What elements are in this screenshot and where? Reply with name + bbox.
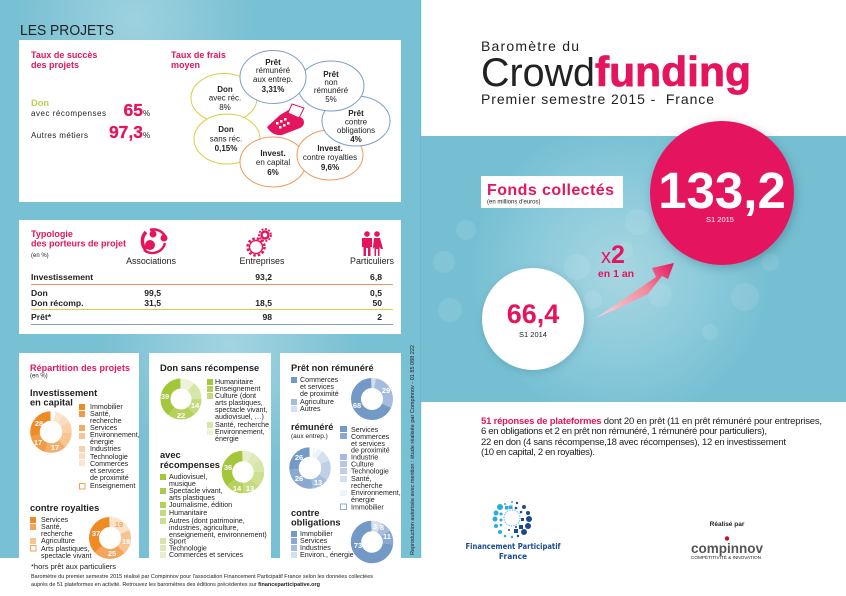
bubble: invest en capital: [240, 137, 306, 187]
column labels: [126, 256, 395, 266]
icon: payment terminal: [267, 104, 304, 135]
heading: les projets: LES PROJETS: [20, 22, 114, 39]
donut: contre obligations: 11: [383, 532, 391, 541]
donut: contre royalties: 19: [122, 537, 130, 546]
bubble: invest en capital: en capital: [256, 158, 290, 167]
row: investissement: 6,8: [370, 272, 382, 282]
heading: avec recompenses: avec: [160, 450, 181, 460]
heading: typologie: Typologie: [31, 229, 73, 239]
legend: contre royalties: Santé,: [41, 523, 62, 531]
legend: pret non remunere: Agriculture: [300, 398, 334, 406]
row: investissement: Investissement: [31, 272, 93, 282]
stat: autres metiers: Autres métiers: [31, 131, 88, 140]
heading: avec recompenses: récompenses: [160, 460, 220, 470]
legend: investissement en capital: [79, 403, 140, 490]
legend: don sans recompense: Santé, recherche: [215, 421, 269, 429]
donut: don sans recompense: 14: [191, 401, 200, 410]
legend: remunere: et services: [351, 440, 385, 448]
circle: 66,4 S1 2014: 66,4: [507, 299, 559, 329]
legend: investissement en capital: Technologie: [90, 453, 128, 461]
heading: pret non remunere: Prêt non rémunéré: [291, 363, 374, 373]
legend: don sans recompense: [207, 378, 269, 443]
multiplier: x2 en 1 an: [598, 241, 634, 280]
legend: investissement en capital: Immobilier: [90, 403, 123, 411]
arrow: growth: [596, 263, 674, 318]
column labels: Entreprises: [240, 256, 285, 266]
bubble: invest en capital: 6%: [267, 168, 279, 177]
legend: pret non remunere: et services: [300, 383, 334, 391]
title block: funding: [595, 48, 751, 95]
bubble: pret contre obligations: Prêt: [348, 109, 364, 118]
stat: don avec recompenses: avec récompenses: [31, 109, 106, 118]
row: don recomp: [31, 298, 382, 308]
legend: contre royalties: Services: [41, 516, 69, 524]
row: don recomp: Don récomp.: [31, 298, 84, 308]
donut: investissement en capital: 28: [35, 419, 43, 428]
legend: remunere: recherche: [351, 482, 383, 490]
column labels: Associations: [126, 256, 176, 266]
bubble: pret non remunere: Prêt: [323, 70, 339, 79]
legend: remunere: Technologie: [351, 468, 389, 476]
heading: remunere: rémunéré: [291, 422, 333, 432]
row: pret: 2: [377, 312, 382, 322]
bubble: invest contre royalties: contre royalties: [303, 153, 357, 162]
row: don: Don: [31, 288, 48, 298]
thin teal divider: [420, 0, 421, 558]
donut: investissement en capital: 17: [34, 438, 42, 447]
subheading: aux entrep: (aux entrep.): [291, 433, 328, 440]
heading: contre obligations: contre: [291, 508, 319, 518]
donut: contre obligations: 3: [373, 522, 377, 531]
panel: don: [149, 353, 271, 559]
donut: avec recompenses: 36: [224, 463, 232, 472]
panel: repartition investissement: [19, 353, 140, 560]
title block: Premier semestre 2015 - France: [481, 91, 714, 107]
donut: contre obligations: [354, 522, 391, 558]
bubble: pret contre obligations: obligations: [337, 126, 375, 135]
legend: avec recompenses: Spectacle vivant,: [169, 487, 223, 495]
heading: taux de succes: Taux de succès: [31, 50, 97, 60]
title block: Baromètre du: [481, 38, 579, 54]
legend: pret non remunere: Commerces: [300, 376, 339, 384]
heading: investissement en capital: Investissement: [30, 388, 97, 398]
footnote: *hors prêt aux particuliers: [31, 562, 116, 571]
bubble: invest en capital: Invest.: [260, 149, 286, 158]
legend: contre obligations: Industries: [300, 544, 331, 552]
donut: investissement en capital: 17: [51, 443, 59, 452]
legend: remunere: Commerces: [351, 433, 390, 441]
legend: don sans recompense: Humanitaire: [215, 378, 253, 386]
legend: remunere: Services: [351, 426, 379, 434]
heading: contre obligations: obligations: [291, 518, 341, 528]
legend: contre royalties: recherche: [41, 530, 73, 538]
bubble: pret remunere: rémunéré: [256, 66, 291, 75]
legend: remunere: de proximité: [351, 446, 390, 454]
donut: contre obligations: 73: [354, 541, 362, 550]
heading: typologie: des porteurs de projet: [31, 238, 126, 248]
donut: contre royalties: [92, 520, 130, 558]
source note: Baromètre du premier semestre 2015 réalisé par Compinnov pour l'association Financement Participatif France selon les données collectées: [31, 574, 373, 580]
donut: contre royalties: 37: [92, 529, 100, 538]
text: plateformes: 6 en obligations et 2 en prêt non rémunéré, 1 rémunéré pour particuliers),: [481, 426, 767, 437]
circle: 133,2 S1 2015: S1 2015: [706, 215, 734, 224]
legend: avec recompenses: arts plastiques: [169, 494, 215, 502]
legend: avec recompenses: Autres (dont patrimoine,: [169, 517, 245, 525]
legend: investissement en capital: de proximité: [90, 474, 129, 482]
stat: don avec recompenses: [31, 98, 150, 120]
bubble: don avec rec: [191, 74, 257, 122]
bubble: don sans rec: 0,15%: [215, 144, 237, 153]
label: fonds collectes: (en millions d'euros): [487, 200, 541, 206]
panel: typologie: [19, 220, 401, 334]
donut: investissement en capital: 7: [52, 411, 56, 420]
legend: remunere: Culture: [351, 460, 374, 468]
legend: pret non remunere: Autres: [300, 405, 321, 413]
bubble: pret non remunere: non: [324, 78, 338, 87]
donut: contre royalties: 25: [108, 549, 116, 558]
legend: contre royalties: Arts plastiques,: [41, 545, 90, 553]
icon: associations: [142, 229, 167, 253]
row: pret: Prêt*: [31, 312, 52, 322]
legend: remunere: Industrie: [351, 454, 378, 462]
legend: avec recompenses: Humanitaire: [169, 509, 207, 517]
row: investissement: [31, 272, 382, 282]
legend: avec recompenses: musique: [169, 480, 196, 488]
donut: contre royalties: 19: [115, 520, 123, 529]
donut: investissement en capital: [34, 411, 67, 452]
row: don: [31, 288, 382, 298]
panel: pret: [280, 353, 401, 559]
icon: gears: [248, 229, 271, 256]
row: investissement: 93,2: [255, 272, 272, 282]
icon: people: [362, 231, 383, 256]
legend: contre obligations: [291, 530, 354, 559]
legend: investissement en capital: Services: [90, 424, 118, 432]
heading: contre royalties: contre royalties: [30, 503, 99, 513]
row: don: 0,5: [370, 288, 382, 298]
legend: avec recompenses: industries, agriculture,: [169, 524, 238, 532]
row: pret: [31, 312, 382, 322]
stat: don avec recompenses: %: [143, 109, 150, 118]
bubble: don sans rec: [194, 114, 260, 164]
title block: [481, 38, 751, 107]
donut: pret non remunere: 29: [382, 386, 390, 395]
logo: compinnov: COMPÉTITIVITÉ & INNOVATION: [691, 554, 761, 560]
legend: remunere: Santé,: [351, 475, 372, 483]
row: don recomp: 31,5: [144, 298, 161, 308]
logo: compinnov: [691, 536, 763, 560]
text: plateformes: [481, 416, 822, 458]
label: fonds collectes: [481, 176, 623, 208]
circle: 133,2 S1 2015: [650, 121, 794, 265]
donut: remunere: 13: [314, 478, 322, 487]
bubble: pret contre obligations: 4%: [350, 135, 362, 144]
donut: remunere: 26: [295, 474, 303, 483]
unit: (en %): [30, 374, 48, 380]
legend: don sans recompense: arts plastiques,: [215, 399, 263, 407]
donut: remunere: 7: [313, 447, 317, 456]
legend: contre royalties: [30, 516, 91, 560]
bubble: invest contre royalties: Invest.: [317, 144, 343, 153]
source note: [31, 574, 373, 588]
row: don: 99,5: [144, 288, 161, 298]
legend: avec recompenses: Commerces et services: [169, 551, 244, 559]
legend: investissement en capital: Environnement,: [90, 431, 140, 439]
donut: don sans recompense: 22: [177, 411, 185, 420]
multiplier: x2 en 1 an: en 1 an: [598, 268, 634, 280]
heading: investissement en capital: en capital: [30, 398, 73, 408]
donut: avec recompenses: 14: [233, 484, 242, 493]
heading: repartition: Répartition des projets: [30, 363, 130, 373]
donut: remunere: [294, 447, 326, 487]
donut: avec recompenses: 13: [246, 484, 254, 493]
legend: avec recompenses: enseignement, environnement): [169, 531, 267, 539]
bubble: pret non remunere: [298, 61, 364, 111]
right teal band: [421, 136, 846, 402]
title block: Crowd: [481, 51, 595, 95]
bubble: invest contre royalties: 9,6%: [321, 163, 339, 172]
bubble: pret remunere: aux entrep.: [253, 75, 293, 84]
heading: don sans recompense: Don sans récompense: [160, 363, 259, 373]
donut: don sans recompense: 39: [161, 392, 169, 401]
legend: avec recompenses: Sport: [169, 538, 186, 546]
legend: pret non remunere: [291, 376, 339, 413]
unit: en pourcent: (en %): [31, 253, 49, 259]
stat: autres metiers: %: [143, 131, 150, 140]
multiplier: x2 en 1 an: x2: [601, 241, 625, 269]
legend: don sans recompense: spectacle vivant,: [215, 406, 267, 414]
bubble: don sans rec: sans réc.: [210, 134, 242, 144]
heading: taux de succes: des projets: [31, 60, 79, 70]
stat: don avec recompenses: Don: [31, 98, 49, 108]
logo: financement participatif france: Financement Participatif: [466, 542, 561, 551]
heading: taux de frais: moyen: [171, 60, 200, 70]
legend: contre obligations: Environ., énergie: [300, 551, 354, 559]
donut: remunere: 26: [295, 453, 303, 462]
bubble: don avec rec: avec réc.: [209, 94, 241, 102]
donut: avec recompenses: [224, 456, 259, 493]
row: don recomp: 50: [372, 298, 382, 308]
legend: avec recompenses: Technologie: [169, 544, 207, 552]
heading: taux de frais: Taux de frais: [171, 50, 226, 60]
bubble: pret contre obligations: [322, 96, 390, 146]
donut: pret non remunere: [353, 383, 390, 415]
row: pret: 98: [262, 312, 272, 322]
legend: avec recompenses: Journalisme, édition: [169, 501, 232, 509]
stat: autres metiers: [31, 122, 150, 142]
logo: compinnov: compinnov: [691, 540, 763, 556]
legend: don sans recompense: énergie: [215, 435, 239, 443]
bubble: don avec rec: 8%: [219, 103, 231, 112]
bubble: pret remunere: 3,31%: [262, 85, 284, 94]
legend: investissement en capital: et services: [90, 467, 124, 475]
column labels: Particuliers: [350, 256, 395, 266]
legend: pret non remunere: de proximité: [300, 390, 339, 398]
legend: investissement en capital: énergie: [90, 438, 114, 446]
legend: remunere: Immobilier: [351, 504, 384, 512]
circle: 133,2 S1 2015: 133,2: [658, 162, 786, 219]
panel: taux de succes and frais: [19, 40, 401, 202]
bubble: pret non remunere: 5%: [325, 95, 337, 104]
legend: investissement en capital: Commerces: [90, 460, 129, 468]
legend: remunere: énergie: [351, 496, 375, 504]
row: don recomp: 18,5: [255, 298, 272, 308]
right header background: [421, 0, 846, 136]
rotated credit text: Reproduction autorisée avec mention : étude réalisée par Compinnov - 01 85 088 222: [410, 345, 416, 555]
legend: don sans recompense: Culture (dont: [215, 392, 256, 400]
legend: don sans recompense: audiovisuel, …): [215, 413, 264, 421]
text: plateformes: 51 réponses de plateformes dont 20 en prêt (11 en prêt rémunéré pour entreprises,: [481, 416, 822, 427]
circle: 66,4 S1 2014: S1 2014: [519, 330, 547, 339]
stat: autres metiers: 97,3: [109, 122, 143, 142]
logo: financement participatif france: [466, 501, 561, 561]
bubble: pret non remunere: rémunéré: [314, 86, 349, 95]
legend: investissement en capital: recherche: [90, 417, 122, 425]
legend: investissement en capital: Santé,: [90, 410, 111, 418]
bubble: pret remunere: [240, 50, 306, 104]
stat: don avec recompenses: 65: [124, 100, 143, 120]
legend: investissement en capital: Industries: [90, 445, 121, 453]
legend: remunere: Environnement,: [351, 489, 401, 497]
right body background: [421, 402, 846, 558]
bubble: invest contre royalties: [297, 130, 363, 180]
text: plateformes: 22 en don (4 sans récompense,18 avec récompenses), 12 en investissement: [481, 437, 786, 448]
legend: remunere: [340, 426, 401, 512]
credit: realise par: Réalisé par: [710, 521, 745, 528]
legend: don sans recompense: Environnement,: [215, 428, 265, 436]
legend: contre royalties: Agriculture: [41, 537, 75, 545]
donut: don sans recompense: [161, 384, 200, 420]
legend: don sans recompense: Enseignement: [215, 385, 260, 393]
donut: contre obligations: 8: [380, 523, 384, 532]
bubble: don sans rec: Don: [218, 125, 234, 134]
donut: pret non remunere: 68: [353, 401, 361, 410]
legend: investissement en capital: Enseignement: [90, 482, 135, 490]
legend: avec recompenses: Audiovisuel,: [169, 473, 207, 481]
legend: avec recompenses: [160, 473, 267, 559]
bubble: pret remunere: Prêt: [265, 58, 281, 67]
source note: auprès de 51 plateformes en activité. Retrouvez les baromètres des éditions précédentes sur financeparticipative.org: [31, 582, 320, 588]
logo: financement participatif france: France: [499, 552, 527, 561]
bubble: pret contre obligations: contre: [345, 118, 368, 126]
legend: contre obligations: Immobilier: [300, 530, 333, 538]
legend: contre obligations: Services: [300, 537, 328, 545]
left background: [0, 0, 421, 558]
circle: 66,4 S1 2014: [482, 268, 584, 370]
bubble: don avec rec: Don: [217, 85, 233, 94]
label: fonds collectes: Fonds collectés: [487, 182, 614, 199]
text: plateformes: (10 en capital, 2 en royalties).: [481, 447, 595, 458]
legend: contre royalties: spectacle vivant: [41, 552, 91, 560]
